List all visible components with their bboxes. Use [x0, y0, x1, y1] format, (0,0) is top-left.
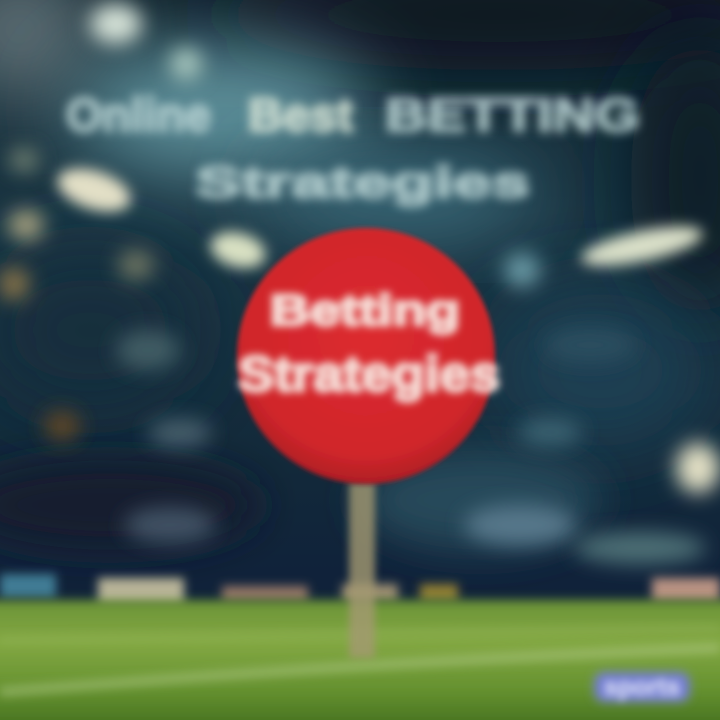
heading: blurred title: Best	[248, 88, 353, 141]
signpost: pole	[349, 482, 375, 658]
sign text	[238, 286, 500, 402]
sign: red circle	[237, 228, 500, 484]
field: green grass	[0, 600, 720, 720]
heading: blurred title: Online	[66, 88, 211, 141]
sign text: Strategies	[238, 346, 500, 402]
floating cards: glowing blurred labels	[0, 4, 720, 564]
stadium boards at horizon	[0, 574, 720, 606]
heading: blurred title	[66, 88, 640, 207]
badge: bottom-right logo	[594, 672, 690, 702]
sign text: Betting	[270, 286, 460, 335]
heading: blurred title: Strategies	[195, 158, 530, 207]
badge: bottom-right logo: sports	[604, 674, 680, 701]
heading: blurred title: BETTING	[385, 88, 640, 141]
